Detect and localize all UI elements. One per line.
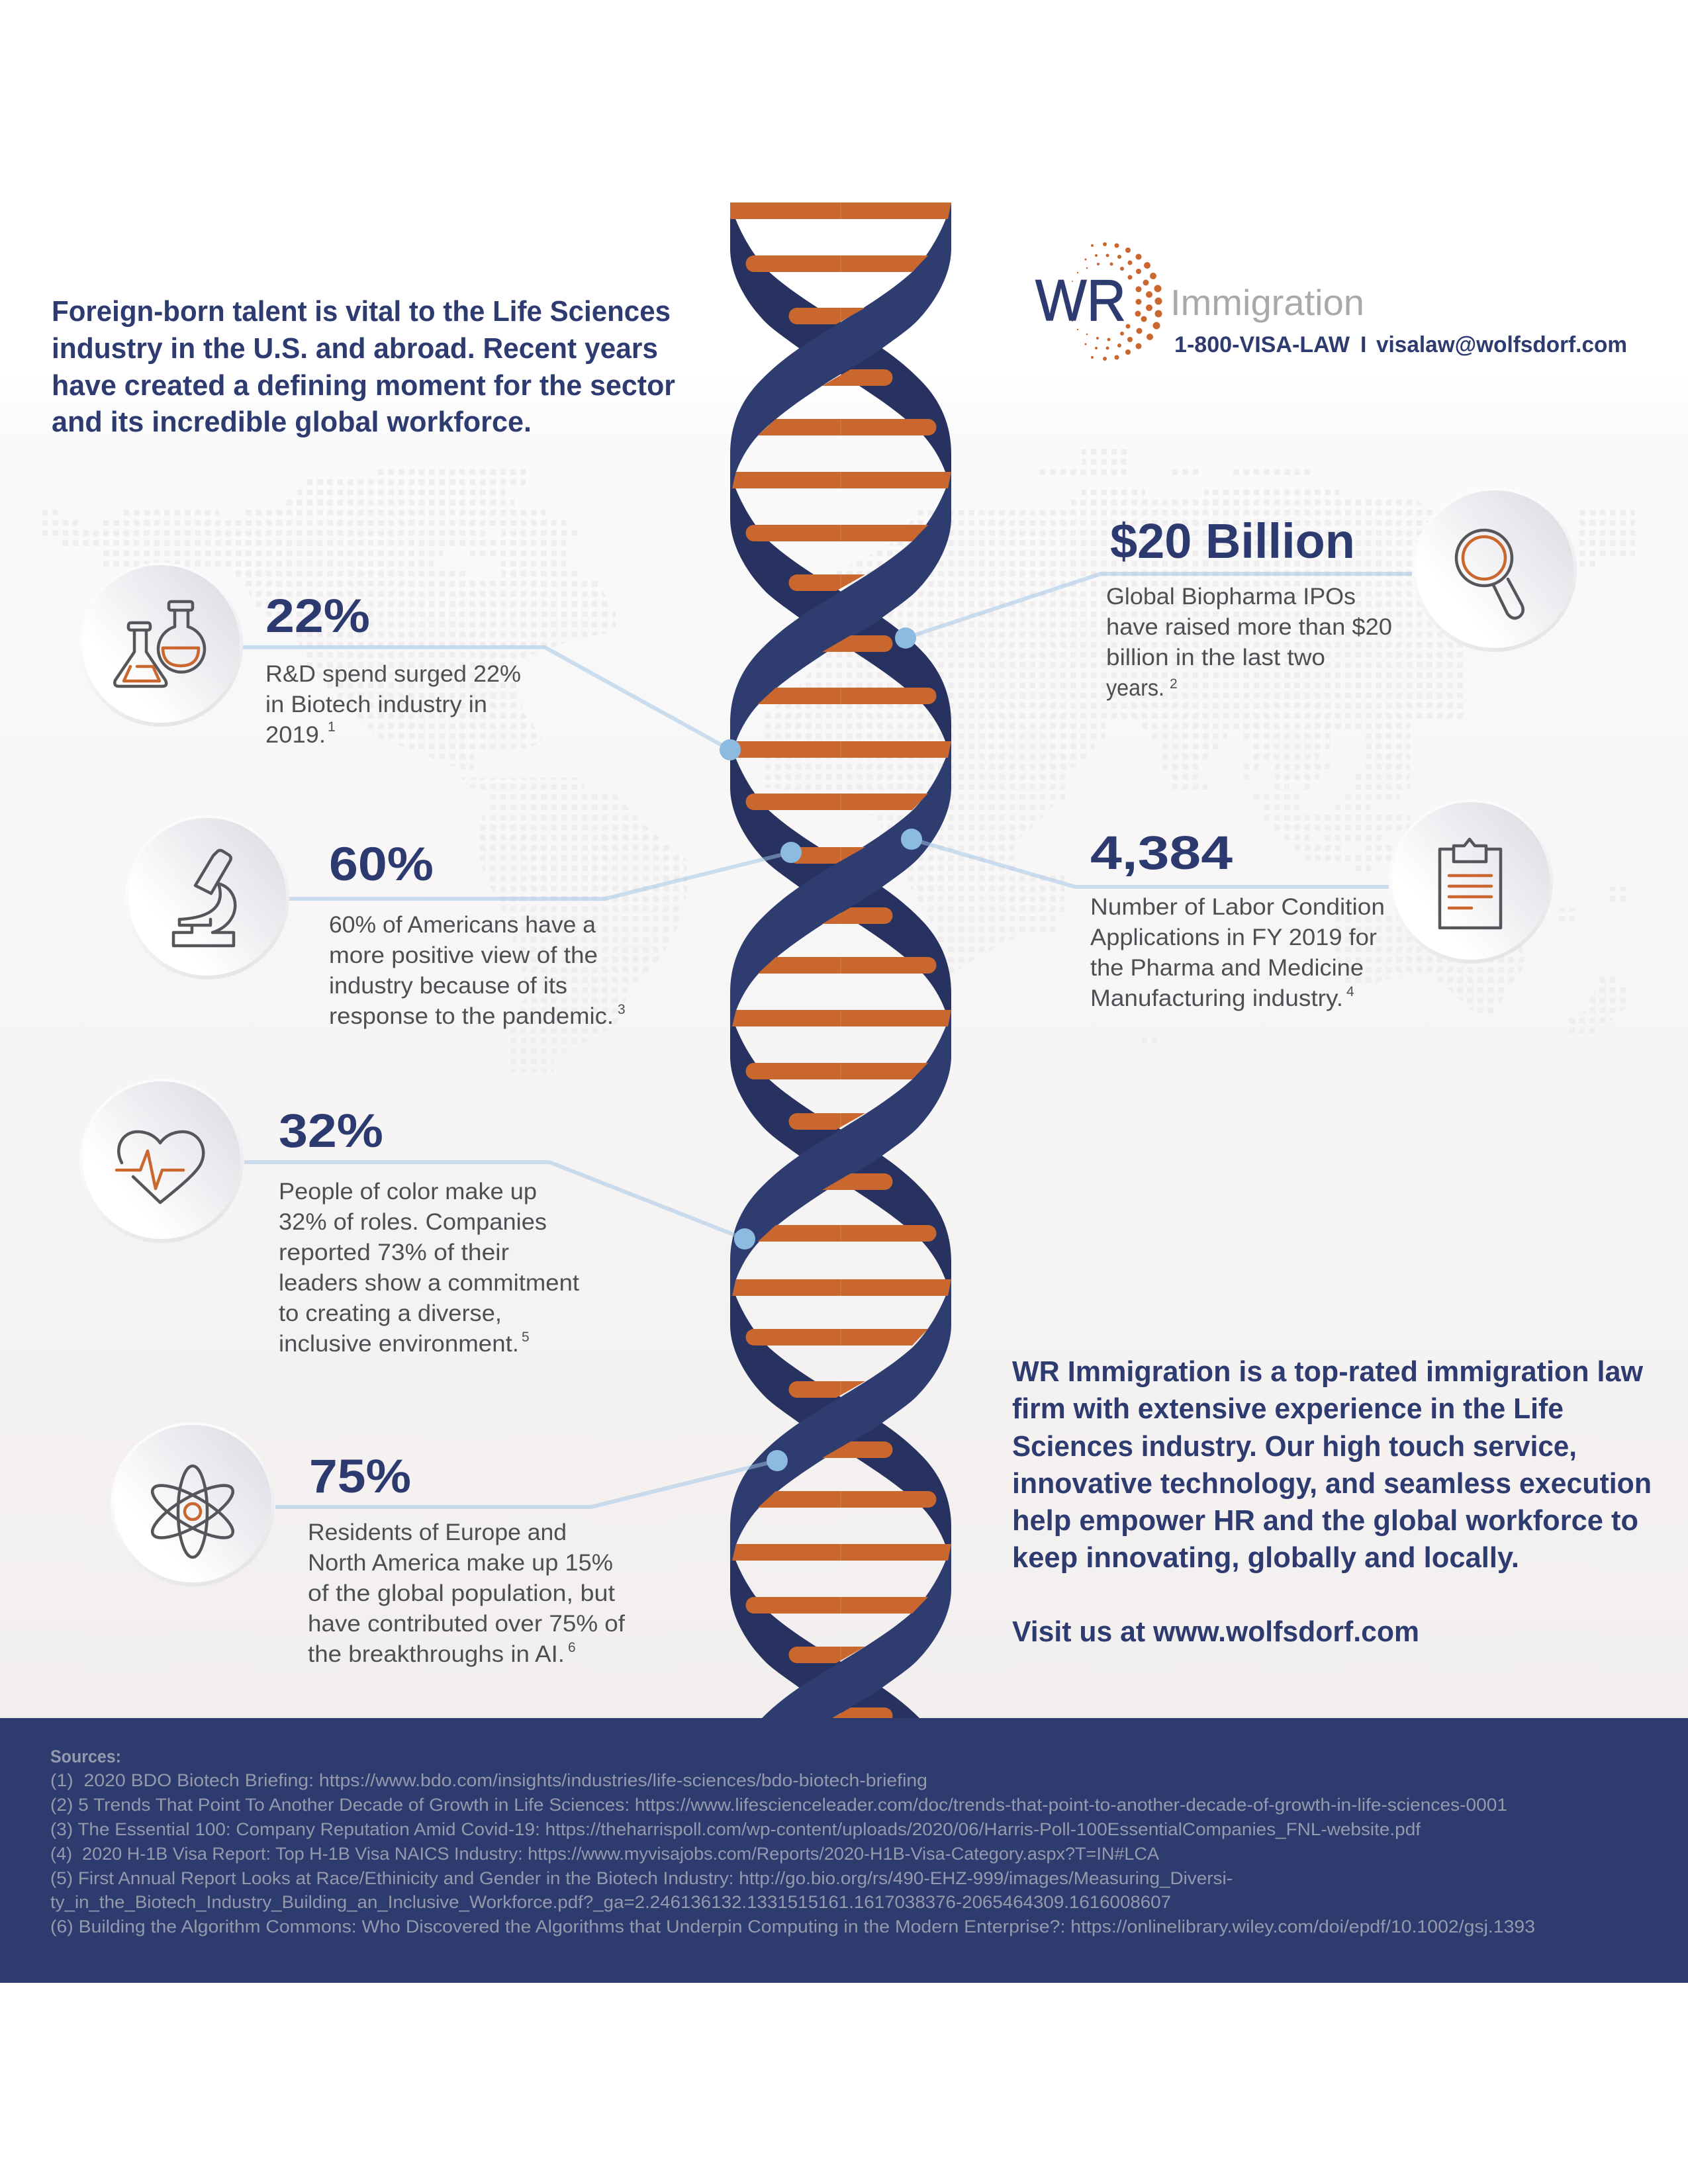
logo: WR Immigration: 1-800-VISA-LAW: [1174, 332, 1350, 357]
sources list: [50, 1747, 1535, 1936]
connector lines: [242, 574, 1412, 1507]
stat: 4,384: 4,384: [1090, 827, 1233, 880]
intro heading: Foreign-born talent is vital to the Life Sciences: [52, 295, 671, 328]
firm description paragraph: WR Immigration is a top-rated immigration law: [1012, 1355, 1644, 1388]
sources list: (5) First Annual Report Looks at Race/Ethinicity and Gender in the Biotech Industry: http://go.bio.org/rs/490-EHZ-999/images/Measuring_Diversi-: [50, 1868, 1233, 1888]
text: labor condition applications: Number of Labor Condition: [1090, 894, 1385, 920]
logo: WR Immigration: I: [1360, 332, 1366, 357]
logo: WR Immigration: visalaw@wolfsdorf.com: [1376, 332, 1627, 357]
text: labor condition applications: Applications in FY 2019 for: [1090, 925, 1377, 950]
text: people of color: inclusive environment.: [279, 1331, 519, 1357]
sources list: ty_in_the_Biotech_Industry_Building_an_Inclusive_Workforce.pdf?_ga=2.246136132.1331515161.1617038376-2065464309.1616008607: [50, 1892, 1171, 1912]
stat: 22%: 22%: [265, 590, 370, 643]
sources list: (2) 5 Trends That Point To Another Decade of Growth in Life Sciences: https://www.lifescienceleader.com/doc/trends-that-point-to-another-decade-of-growth-in-life-sciences-0001: [50, 1795, 1507, 1815]
firm description paragraph: keep innovating, globally and locally.: [1012, 1541, 1519, 1574]
intro heading: have created a defining moment for the sector: [52, 369, 675, 402]
stat: 60%: 60%: [329, 839, 434, 891]
text: Americans view: response to the pandemic.: [329, 1003, 614, 1029]
text: Europe and North America: of the global population, but: [308, 1580, 615, 1606]
text: people of color: 32% of roles. Companies: [279, 1209, 547, 1235]
stat: $20 Billion: $20 Billion: [1110, 514, 1355, 569]
icon: logo dot halo: [1072, 242, 1162, 361]
text: biopharma IPOs: have raised more than $20: [1106, 614, 1392, 640]
icon: clipboard: [1389, 799, 1553, 964]
text: biopharma IPOs: billion in the last two: [1106, 645, 1325, 670]
stat: 4,384: [1090, 799, 1553, 1011]
text: Europe and North America: Residents of Europe and: [308, 1520, 567, 1545]
text: people of color: 5: [522, 1330, 530, 1345]
icon: atom: [111, 1422, 275, 1586]
firm description paragraph: [1012, 1355, 1652, 1648]
text: Europe and North America: North America make up 15%: [308, 1550, 613, 1576]
intro heading: [52, 295, 675, 438]
firm description paragraph: help empower HR and the global workforce to: [1012, 1504, 1638, 1537]
text: biopharma IPOs: [1106, 584, 1392, 701]
logo: WR Immigration: Immigration: [1170, 282, 1364, 323]
logo: WR Immigration: WR: [1035, 267, 1126, 333]
text: R&D spend: [265, 661, 521, 748]
intro heading: industry in the U.S. and abroad. Recent years: [52, 332, 658, 365]
sources list: (1) 2020 BDO Biotech Briefing: https://www.bdo.com/insights/industries/life-sciences/bdo-biotech-briefing: [50, 1770, 927, 1790]
dotted world map: [42, 447, 1635, 1072]
DNA double helix: [730, 203, 951, 1828]
text: Americans view: more positive view of the: [329, 942, 598, 968]
icon: flasks: [79, 563, 243, 727]
sources list: Sources:: [50, 1747, 121, 1766]
text: R&D spend: in Biotech industry in: [265, 692, 487, 717]
intro heading: and its incredible global workforce.: [52, 406, 532, 438]
text: people of color: People of color make up: [279, 1179, 537, 1205]
text: people of color: reported 73% of their: [279, 1240, 509, 1265]
text: Americans view: industry because of its: [329, 973, 567, 999]
firm description paragraph: firm with extensive experience in the Life: [1012, 1392, 1564, 1425]
sources list: (6) Building the Algorithm Commons: Who Discovered the Algorithms that Underpin Computing in the Modern Enterprise?: https://onlinelibrary.wiley.com/doi/epdf/10.1002/gsj.1393: [50, 1917, 1535, 1936]
text: Europe and North America: the breakthroughs in AI.: [308, 1641, 565, 1667]
text: Americans view: [329, 912, 626, 1029]
text: biopharma IPOs: 2: [1170, 676, 1178, 692]
text: Americans view: 60% of Americans have a: [329, 912, 596, 938]
firm description paragraph: innovative technology, and seamless execution: [1012, 1467, 1652, 1500]
sources list: (3) The Essential 100: Company Reputation Amid Covid-19: https://theharrispoll.com/wp-content/uploads/2020/06/Harris-Poll-100EssentialCompanies_FNL-website.pdf: [50, 1819, 1421, 1839]
text: R&D spend: R&D spend surged 22%: [265, 661, 521, 687]
icon: heart with pulse: [79, 1079, 244, 1243]
text: R&D spend: 1: [328, 719, 336, 735]
logo: WR Immigration: [1035, 242, 1627, 361]
stat: 75%: [111, 1422, 625, 1667]
footer sources panel: [0, 1718, 1688, 1983]
text: labor condition applications: the Pharma and Medicine: [1090, 955, 1364, 981]
firm description paragraph: Sciences industry. Our high touch service,: [1012, 1430, 1577, 1463]
stat: 60%: [125, 815, 626, 1029]
text: people of color: [279, 1179, 579, 1357]
sources list: (4) 2020 H-1B Visa Report: Top H-1B Visa NAICS Industry: https://www.myvisajobs.com/Reports/2020-H1B-Visa-Category.aspx?T=IN#LCA: [50, 1844, 1159, 1864]
icon: magnifying glass: [1413, 488, 1577, 652]
stat: $20 Billion: [1106, 488, 1577, 701]
text: biopharma IPOs: Global Biopharma IPOs: [1106, 584, 1356, 610]
stat: 75%: 75%: [309, 1451, 411, 1503]
text: labor condition applications: [1090, 894, 1385, 1011]
text: people of color: to creating a diverse,: [279, 1300, 502, 1326]
text: Europe and North America: have contributed over 75% of: [308, 1611, 625, 1637]
stat: 32%: 32%: [279, 1105, 383, 1158]
text: labor condition applications: 4: [1346, 984, 1354, 999]
text: people of color: leaders show a commitment: [279, 1270, 579, 1296]
text: biopharma IPOs: years.: [1106, 675, 1164, 701]
text: Europe and North America: 6: [568, 1640, 576, 1655]
firm description paragraph: Visit us at www.wolfsdorf.com: [1012, 1615, 1419, 1648]
icon: microscope: [125, 815, 289, 979]
connector dots: [720, 627, 922, 1471]
text: labor condition applications: Manufacturing industry.: [1090, 985, 1343, 1011]
stat: 32%: [79, 1079, 579, 1357]
text: R&D spend: 2019.: [265, 722, 326, 748]
text: Europe and North America: [308, 1520, 625, 1667]
text: Americans view: 3: [618, 1002, 626, 1017]
stat: 22%: [79, 563, 521, 748]
